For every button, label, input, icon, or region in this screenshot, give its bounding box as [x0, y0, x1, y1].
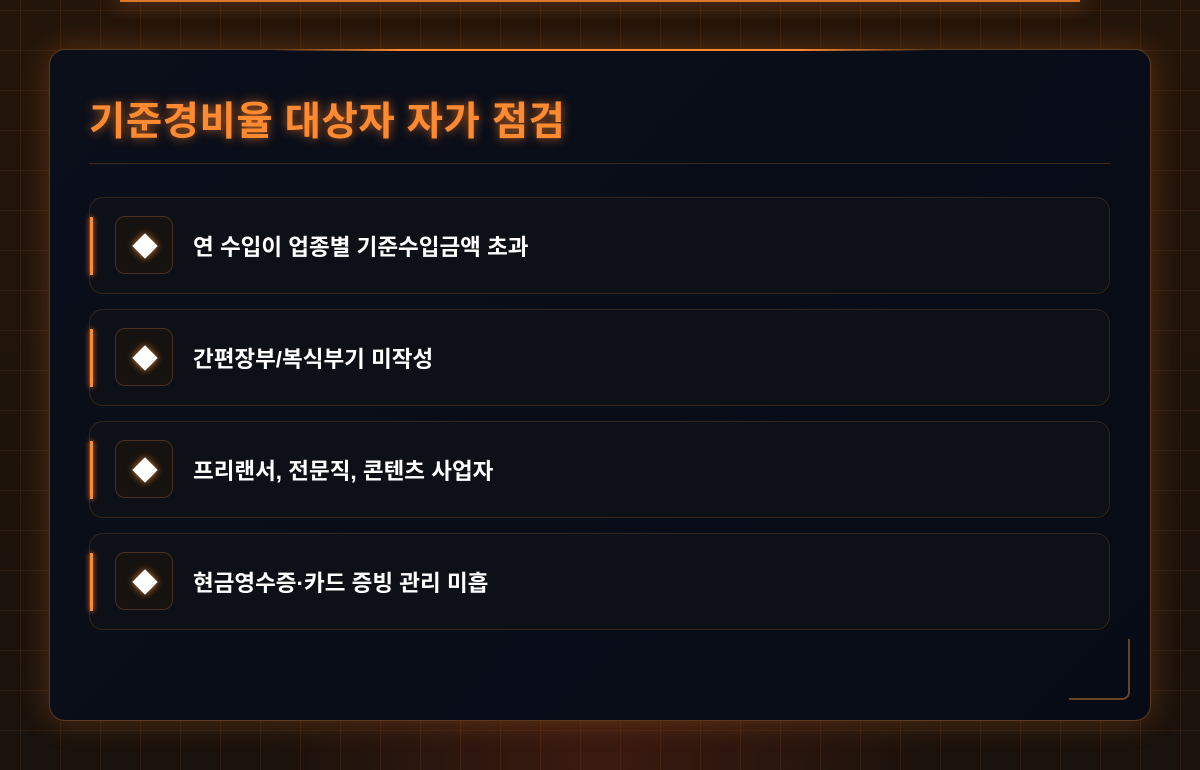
item 1 [89, 197, 1110, 294]
item 3 [89, 421, 1110, 518]
item 2 [89, 309, 1110, 406]
text: 연 수입이 업종별 기준수입금액 초과 [193, 235, 529, 260]
item 4 [89, 533, 1110, 630]
corner bracket [1069, 639, 1130, 700]
text: 프리랜서, 전문직, 콘텐츠 사업자 [193, 459, 493, 484]
title: 기준경비율 대상자 자가 점검 [89, 100, 566, 144]
text: 간편장부/복식부기 미작성 [193, 347, 433, 372]
text: 현금영수증·카드 증빙 관리 미흡 [193, 571, 488, 596]
icon: diamond [115, 440, 173, 498]
icon: diamond [115, 552, 173, 610]
icon: diamond [115, 216, 173, 274]
icon: diamond [115, 328, 173, 386]
